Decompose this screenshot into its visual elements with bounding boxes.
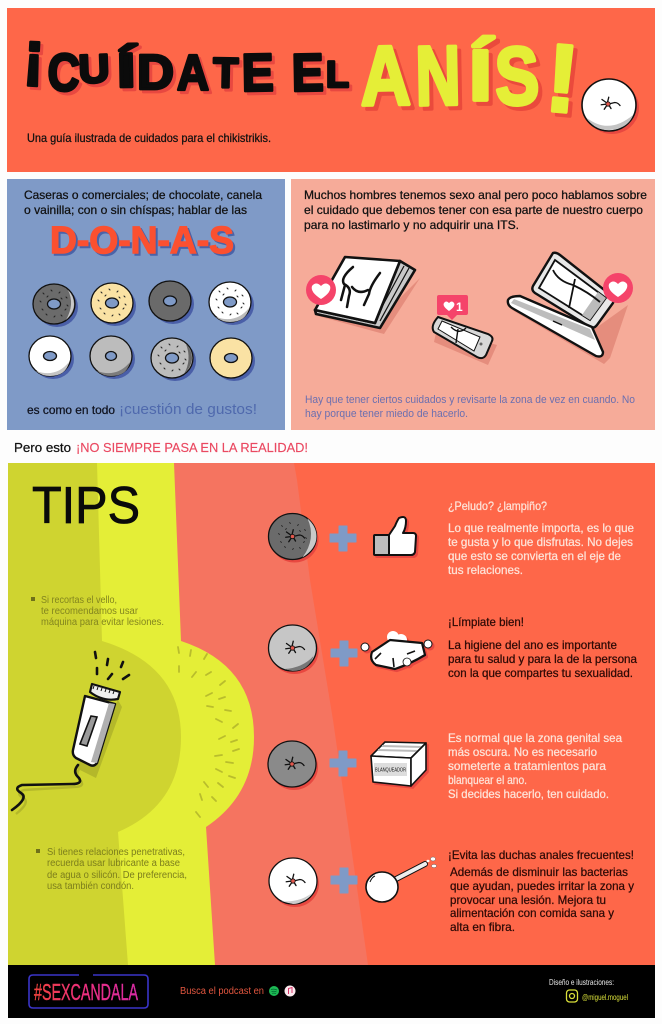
icon: music [284,986,296,996]
panel: donas [7,179,285,430]
text: peludo: te gusta y lo que disfrutas. No dejes [448,536,633,549]
closing line: ¡cuestión de gustos! [119,402,257,418]
donut: vanilla sprinkles [91,283,136,326]
icon: thumbs up [374,517,416,555]
text: limpiate: ¡Límpiate bien! [448,616,524,629]
text: peludo: que esto se convierta en el eje de [448,550,621,563]
credit: design: Diseño e ilustraciones: [549,977,614,987]
decoration: hair dashes [178,647,239,817]
title: cuídate el: C [47,43,81,103]
note text [305,394,635,420]
title: anís: A [360,28,411,123]
icon: instagram [566,990,578,1002]
heading: donas: D-O-N-A-S [50,220,234,262]
footer [8,965,655,1018]
icon: dark grey donut [268,741,318,790]
text: peludo [448,500,634,577]
title: anís: N [415,28,461,123]
text: blanqueamiento: Es normal que la zona genital sea [448,732,623,745]
donut: chocolate sprinkles [33,284,78,327]
text: peludo: tus relaciones. [448,564,523,577]
icon: like badge [437,295,468,320]
intro paragraph [304,189,647,232]
icon: laptop [508,253,628,364]
icon: phone [433,317,497,365]
text: blanqueamiento: someterte a tratamientos para [448,760,607,773]
title: anís: Í [469,37,495,116]
text: peludo: Lo que realmente importa, es lo que [448,522,634,535]
intro text: o vainilla; con o sin chíspas; hablar de las [24,204,247,217]
tip: recortar vello: Si recortas el vello, [41,595,117,606]
panel: header [7,8,655,172]
icon: plus [331,641,357,666]
tip: recortar vello [31,595,164,628]
icon: enema bulb [366,857,436,902]
intro text [24,189,263,217]
text: duchas: alta en fibra. [450,921,515,934]
icon: white donut [582,79,639,134]
text: duchas: alimentación con comida sana y [450,907,614,920]
text: peludo: ¿Peludo? ¿lampiño? [448,500,548,513]
icon: heart on magazine [306,275,336,305]
title: anís [360,24,582,134]
title: cuídate el: E [241,43,274,103]
title: cuídate el: T [213,49,239,96]
text: duchas: ¡Evita las duchas anales frecuentes! [448,849,634,862]
text: podcast: Busca el podcast en [180,986,264,997]
row 4: duchas [269,849,634,934]
text: duchas: que ayudan, puedes irritar la zona y [450,880,634,893]
panel: tips [8,463,655,965]
text: limpiate [448,616,638,680]
title: cuídate el: D [137,46,174,100]
text: limpiate: para tu salud y para la de la persona [448,653,638,666]
icon: plus [331,868,357,893]
panel: intro [291,179,655,430]
icon: plus [330,526,356,551]
donut: chocolate plain [149,281,194,324]
icon: clipper [12,652,129,814]
title: cuídate el [22,19,349,103]
intro text: Caseras o comerciales; de chocolate, canela [24,189,263,202]
text: duchas [448,849,634,934]
tip: lubricante: usa también condón. [47,881,134,892]
note text: Hay que tener ciertos cuidados y revisarte la zona de vez en cuando. No [305,394,635,406]
text: limpiate: La higiene del ano es importante [448,639,617,652]
tip: lubricante: Si tienes relaciones penetrativas, [47,847,185,858]
title: cuídate el: L [326,54,349,95]
text: blanqueamiento [448,732,623,801]
row 2: limpieza [268,616,638,680]
icon: grey donut [268,625,318,674]
intro paragraph: el cuidado que debemos tener con esa parte de nuestro cuerpo [304,204,643,217]
title: cuídate el: ¡ [22,19,46,90]
logo: sexcandala [29,975,148,1008]
text: blanqueamiento: más oscura. No es necesario [448,746,597,759]
text: limpiate: con la que compartes tu sexualidad. [448,667,633,680]
icon: dark hairy donut [268,514,318,562]
text: duchas: provocar una lesión. Mejora tu [450,894,606,907]
subtitle: Una guía ilustrada de cuidados para el chikistrikis. [27,132,271,145]
text: blanqueamiento: blanquear el ano. [448,774,527,787]
logo: sexcandala: #SEXCANDALA [34,979,138,1005]
tip: recortar vello: te recomendamos usar [41,606,139,617]
row 1: peludo [268,500,634,577]
title: cuídate el: U [78,47,110,92]
closing line [27,402,257,418]
credit: handle: @miguel.moguel [582,992,628,1002]
title: cuídate el: A [177,45,209,101]
title: cuídate el: Í [116,43,139,97]
donut: grey plain [90,336,135,379]
heading: tips: TIPS [32,477,140,535]
icon: plus [330,751,356,776]
row 3: blanqueador [268,732,623,801]
donut: grey sprinkles [151,338,196,381]
icon: like badge: 1 [456,300,463,314]
intro paragraph: Muchos hombres tenemos sexo anal pero poco hablamos sobre [304,189,647,202]
closing line: es como en todo [27,404,115,417]
icon: spotify [269,986,279,996]
icon: soap [361,631,432,669]
text: blanqueamiento: Si decides hacerlo, ten cuidado. [448,788,609,801]
icon: magazine [315,257,420,334]
icon: bleach box: BLANQUEADOR [375,768,406,774]
donut: white plain [29,336,74,379]
donut: vanilla plain [210,338,255,381]
text: duchas: Además de disminuir las bacterias [450,866,628,879]
note text: hay porque tener miedo de hacerlo. [305,408,468,420]
tip: lubricante: de agua o silicón. De preferencia, [47,870,187,881]
tip: lubricante: recuerda usar lubricante a base [47,858,180,869]
intro paragraph: para no lastimarlo y no adquirir una ITS. [304,219,519,232]
title: anís: S [493,31,541,123]
subheading: pero esto: Pero esto [14,440,71,455]
icon: bleach box [371,742,426,786]
donut: white sprinkles [209,282,254,325]
title: cuídate el: E [291,43,324,103]
icon: heart on laptop [603,273,633,303]
tip: lubricante [36,847,187,892]
title: anís: ! [542,24,582,134]
tip: recortar vello: máquina para evitar lesiones. [41,617,164,628]
subheading: pero esto: ¡NO SIEMPRE PASA EN LA REALIDAD! [76,440,308,455]
icon: white donut [269,858,319,907]
